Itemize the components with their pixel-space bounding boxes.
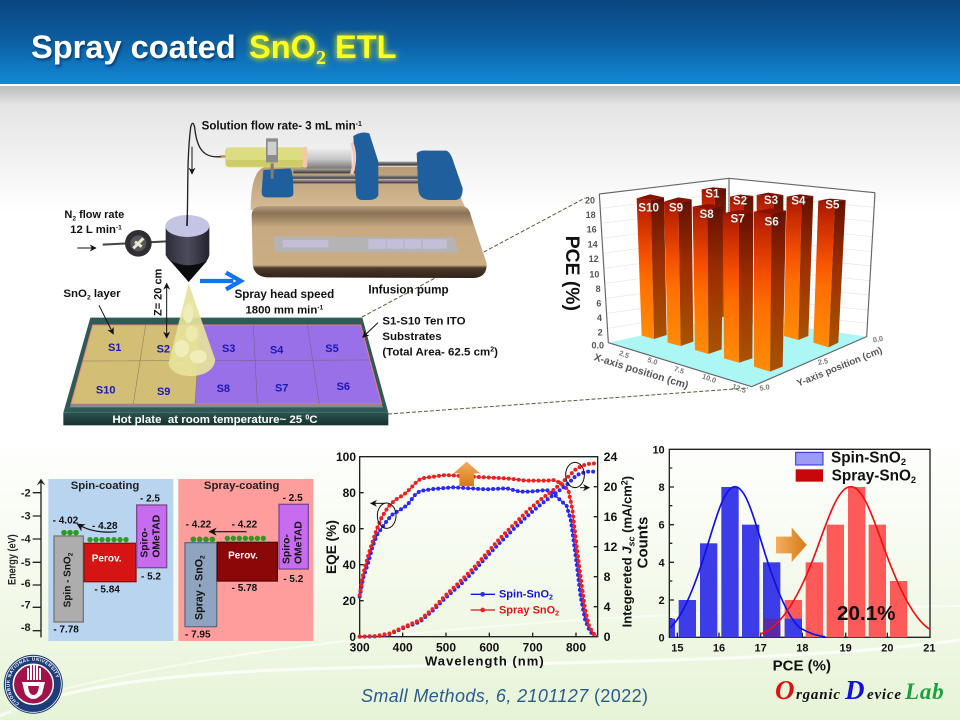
bottom ticks (671, 643, 935, 655)
energy axis: -7 (21, 600, 31, 612)
x axis title: X-axis position (cm) (592, 352, 690, 392)
spin gaussian fit (669, 487, 825, 637)
N2 rate: 12 L min (70, 224, 116, 236)
legend: 2 (549, 595, 553, 602)
N2 label: N (64, 209, 72, 221)
left ticks: 2 (659, 595, 665, 607)
background curves (0, 606, 960, 716)
improvement arrow (453, 462, 480, 486)
right axis title: sc (626, 536, 636, 546)
left ticks: 100 (336, 450, 356, 464)
best value: 20.1% (837, 602, 896, 625)
plot frame (669, 449, 930, 637)
legend: 2 (911, 475, 916, 485)
bottom axis title: Wavelength (nm) (425, 653, 544, 668)
substrate labels: S7 (275, 383, 288, 395)
spiro block: OMeTAD (151, 514, 162, 558)
spin-coating diagram: - 4.28 (92, 521, 118, 532)
infusion pump (220, 132, 487, 278)
hot plate (63, 318, 388, 426)
spray-coating diagram: - 4.22 (232, 519, 258, 530)
left ticks: 20 (343, 594, 356, 608)
bar labels: S4 (791, 194, 806, 207)
integrated current red curve (360, 463, 598, 637)
substrate labels: S1 (108, 342, 121, 354)
right ticks: 16 (604, 510, 618, 524)
SnO2 layer label: layer (91, 288, 121, 300)
substrate labels: S8 (217, 383, 230, 395)
left ticks: 4 (659, 557, 666, 569)
bar labels: S2 (733, 194, 748, 207)
bottom ticks: 700 (523, 640, 543, 654)
spray SnO2 block: 2 (200, 555, 207, 559)
3D PCE bar chart (561, 178, 884, 395)
substrates label: 2 (490, 347, 494, 354)
tubing (187, 123, 221, 226)
spray head (165, 215, 209, 282)
spin-coating diagram: Spin-coating (71, 480, 139, 492)
z axis ticks: 8 (596, 284, 601, 294)
substrate labels: S5 (325, 343, 339, 355)
bar labels: S3 (764, 194, 779, 207)
z axis ticks: 10 (589, 269, 599, 279)
height label: Z= 20 cm (153, 268, 165, 316)
energy axis (7, 479, 45, 637)
spray head speed label: Spray head speed (234, 288, 334, 301)
energy axis: -5 (21, 557, 31, 569)
legend (471, 589, 559, 617)
y axis title: Counts (634, 517, 651, 568)
bottom ticks: 21 (923, 643, 935, 655)
x axis ticks (618, 348, 747, 395)
legend: Spray-SnO (832, 468, 911, 485)
z axis ticks: 2 (598, 328, 603, 338)
dashed zoom lines (362, 198, 748, 414)
left ticks: 60 (343, 522, 356, 536)
spin bars (670, 487, 802, 637)
travel arrow (200, 273, 241, 289)
integrated current blue curve (360, 472, 598, 637)
Organic Device Lab logo: D (844, 675, 865, 705)
spiro block (137, 505, 167, 568)
spray-coating diagram: Spray-coating (204, 480, 280, 492)
right ticks: 0 (604, 630, 611, 644)
y axis ticks (759, 334, 884, 393)
spin SnO2 block: 2 (68, 552, 75, 556)
left ticks: 10 (652, 444, 665, 456)
spiro block: Spiro- (281, 534, 292, 564)
substrates label: Substrates (382, 331, 442, 343)
right axis title: (mA/cm (620, 485, 635, 536)
bottom ticks: 17 (755, 643, 767, 655)
spray SnO2 block (185, 543, 217, 627)
bar labels: S1 (705, 187, 720, 200)
energy axis: -2 (21, 487, 31, 499)
bar labels: S6 (765, 215, 779, 228)
bottom ticks: 500 (436, 640, 456, 654)
bottom ticks: 15 (671, 643, 683, 655)
bottom ticks: 16 (713, 643, 725, 655)
legend (796, 450, 916, 485)
z axis ticks (585, 195, 604, 350)
right ticks: 8 (604, 570, 611, 584)
hot plate label: C (309, 414, 318, 426)
shift arrow (776, 527, 807, 562)
spin-coating diagram: - 5.2 (141, 571, 161, 582)
legend: Spin-SnO (499, 589, 549, 601)
legend: 2 (555, 610, 559, 617)
right circle marker (566, 462, 584, 488)
bottom ticks: 20 (881, 643, 893, 655)
substrate labels: S4 (270, 345, 284, 357)
SnO2 pointer (99, 305, 113, 334)
bottom ticks: 400 (393, 640, 413, 654)
perovskite block (217, 542, 277, 581)
spin-coating diagram: - 7.78 (53, 624, 79, 635)
z axis title: PCE (%) (561, 236, 582, 311)
bottom ticks: 19 (840, 643, 852, 655)
bottom ticks (350, 640, 586, 654)
left axis title: EQE (%) (324, 520, 339, 574)
y axis title: Y-axis position (cm) (795, 345, 884, 389)
spray bars (785, 487, 907, 637)
z axis ticks: 20 (585, 195, 595, 205)
z axis ticks: 6 (596, 299, 601, 309)
bar labels: S7 (731, 212, 745, 225)
gas valve (103, 230, 167, 257)
EQE red curve (360, 475, 598, 636)
bottom ticks: 18 (796, 643, 808, 655)
bar labels: S10 (638, 202, 659, 215)
bar labels: S9 (669, 202, 684, 215)
substrates label (382, 316, 498, 358)
spiro block: OMeTAD (293, 521, 304, 564)
left arrow (371, 502, 385, 505)
left ticks: 0 (659, 632, 665, 644)
left ticks: 40 (343, 558, 356, 572)
x axis ticks: 10.0 (701, 372, 717, 385)
N2 label: 2 (72, 215, 76, 222)
left ticks: 0 (349, 630, 356, 644)
spray-coating diagram: - 7.95 (185, 629, 211, 640)
Organic Device Lab logo: evice (867, 687, 902, 703)
spray-coating diagram: - 5.78 (232, 583, 258, 594)
left circle marker (377, 503, 396, 528)
citation: Small Methods, 6, 2101127 (2022) (361, 686, 648, 706)
title: 2 (316, 47, 326, 69)
spin-coating diagram (53, 480, 167, 635)
left ticks: 80 (343, 486, 356, 500)
z axis ticks: 4 (597, 313, 602, 323)
legend: 2 (901, 457, 906, 467)
speed value: -1 (317, 305, 323, 312)
hot plate label: Hot plate at room temperature~ 25 (112, 414, 302, 426)
spray-coating diagram: - 2.5 (283, 493, 303, 504)
legend: Spray SnO (499, 604, 555, 616)
substrate labels: S2 (157, 344, 170, 356)
right ticks: 24 (604, 450, 618, 464)
left ticks: 6 (659, 520, 665, 532)
pump label: Infusion pump (368, 284, 449, 297)
bar labels: S8 (700, 208, 714, 221)
header banner (0, 0, 960, 86)
energy level diagram (7, 479, 313, 641)
spray cone (168, 283, 215, 376)
bar labels (638, 187, 840, 228)
spray-coating diagram: - 4.22 (186, 519, 212, 530)
overlap bar (764, 619, 780, 637)
right arrow (580, 486, 589, 489)
spray coating schematic (63, 121, 498, 426)
title: ETL (326, 28, 397, 65)
energy axis: Energy (eV) (7, 534, 19, 585)
left ticks (652, 444, 666, 644)
right ticks: 4 (604, 600, 611, 614)
title (31, 28, 397, 69)
perovskite block (84, 543, 136, 582)
energy axis: -6 (21, 578, 31, 590)
pump rods (290, 162, 427, 183)
x axis title: PCE (%) (773, 658, 831, 675)
y axis ticks: 2.5 (817, 356, 829, 367)
bars back row (702, 187, 846, 347)
spin SnO2 block (54, 536, 83, 622)
substrates pointer (363, 323, 378, 337)
energy axis: -3 (21, 511, 31, 523)
z axis ticks: 12 (589, 254, 599, 264)
spray-coating diagram: - 5.2 (283, 574, 304, 585)
chart walls (599, 178, 875, 387)
spin-coating diagram: - 5.84 (94, 585, 120, 596)
panel: spray-coating background (178, 479, 313, 641)
z axis ticks: 16 (587, 225, 597, 235)
panel: spin-coating background (48, 479, 173, 641)
title: SnO (249, 28, 316, 65)
x axis ticks: 7.5 (673, 364, 686, 376)
energy axis: -8 (21, 622, 31, 634)
legend: Spin-SnO (831, 450, 901, 467)
y axis ticks: 0.0 (872, 334, 884, 345)
university seal: CHONBUK NATIONAL UNIVERSITY (6, 657, 60, 706)
substrates label: (Total Area- 62.5 cm (382, 346, 490, 358)
EQE chart (324, 450, 636, 668)
spin-coating diagram: - 4.02 (53, 515, 79, 526)
bar labels: S5 (825, 198, 840, 211)
PCE histogram (634, 444, 935, 675)
syringe (220, 138, 354, 179)
Organic Device Lab logo: Lab (904, 679, 944, 704)
right axis title: 2 (619, 480, 629, 485)
height arrow (165, 283, 168, 338)
hot plate label: 0 (305, 414, 309, 421)
left ticks (336, 450, 356, 644)
right ticks (604, 450, 618, 644)
substrates (69, 325, 383, 407)
substrate labels: S10 (96, 384, 115, 396)
Organic Device Lab logo: rganic (796, 687, 841, 703)
right axis title: Integereted J (620, 546, 635, 627)
z axis ticks: 14 (588, 239, 598, 249)
spiro block: Spiro- (140, 527, 151, 558)
title: Spray coated (31, 28, 236, 65)
x axis ticks: 2.5 (618, 348, 631, 360)
spray SnO2 block: Spray - SnO (194, 559, 206, 620)
bottom ticks: 800 (566, 640, 586, 654)
flow arrow down (190, 147, 193, 174)
right ticks: 12 (604, 540, 618, 554)
x axis ticks: 12.5 (731, 382, 747, 395)
spray-coating diagram (185, 480, 308, 640)
right ticks: 20 (604, 480, 618, 494)
solution flow label: -1 (356, 121, 362, 128)
bottom ticks: 300 (350, 640, 370, 654)
spray gaussian fit (760, 487, 930, 634)
x axis ticks: 5.0 (646, 355, 659, 367)
energy axis: -4 (21, 534, 32, 546)
Organic Device Lab logo: O (775, 675, 795, 705)
y axis ticks: 5.0 (759, 382, 770, 393)
N2 label: flow rate (76, 209, 124, 221)
SnO2 layer label: SnO (63, 288, 87, 300)
perovskite block: Perov. (92, 554, 122, 565)
pump clamps (262, 132, 463, 200)
SnO2 layer label: 2 (87, 294, 91, 301)
spin-coating diagram: - 2.5 (140, 493, 160, 504)
plot frame (360, 457, 598, 637)
EQE blue curve (360, 487, 594, 637)
bars front row (637, 194, 786, 372)
z axis ticks: 18 (586, 210, 596, 220)
z axis ticks: 0.0 (591, 340, 604, 350)
N2 arrow (77, 246, 96, 249)
substrate labels: S6 (337, 381, 350, 393)
spiro block (279, 504, 308, 569)
perovskite block: Perov. (228, 550, 258, 561)
substrate labels (96, 342, 350, 398)
bottom ticks: 600 (479, 640, 500, 654)
solution flow label: Solution flow rate- 3 mL min (202, 121, 356, 133)
spin SnO2 block: Spin - SnO (63, 556, 74, 607)
substrate labels: S3 (222, 343, 235, 355)
left ticks: 8 (659, 482, 665, 494)
N2 rate: -1 (116, 224, 122, 231)
pump display panel (273, 237, 458, 253)
speed value: 1800 mm min (245, 304, 317, 316)
substrate labels: S9 (157, 386, 170, 398)
right axis title: ) (620, 476, 635, 480)
substrates label: ) (494, 346, 498, 358)
substrates label: S1-S10 Ten ITO (382, 316, 466, 328)
